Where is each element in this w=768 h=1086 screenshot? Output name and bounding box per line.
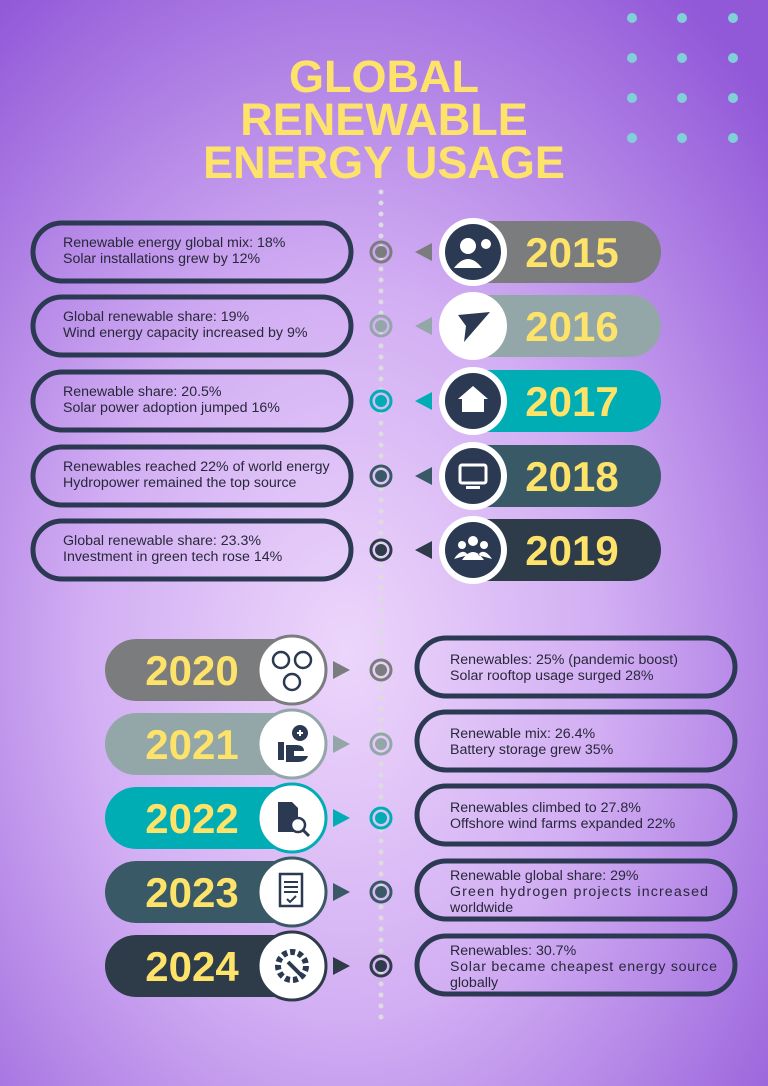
row 2015: Solar installations grew by 12% [63, 251, 261, 267]
row 2016: Global renewable share: 19% [63, 309, 250, 325]
row 2015: 2015 [525, 229, 619, 276]
title: ENERGY USAGE [203, 137, 565, 188]
row 2019: 2019 [525, 527, 619, 574]
row 2021: Battery storage grew 35% [450, 742, 614, 758]
row 2020: Solar rooftop usage surged 28% [450, 668, 654, 684]
row 2016: Wind energy capacity increased by 9% [63, 325, 308, 341]
row 2018: Renewables reached 22% of world energy [63, 459, 330, 475]
row 2023: worldwide [449, 900, 513, 916]
row 2017: Solar power adoption jumped 16% [63, 400, 280, 416]
row 2017 [33, 367, 661, 435]
row 2019 [33, 516, 661, 584]
timeline dotted line [378, 192, 384, 1020]
row 2016: 2016 [525, 303, 619, 350]
row 2019: Global renewable share: 23.3% [63, 533, 261, 549]
row 2020: Renewables: 25% (pandemic boost) [450, 652, 678, 668]
row 2024: globally [450, 975, 499, 991]
title [203, 51, 565, 188]
row 2023: Green hydrogen projects increased [450, 884, 708, 900]
row 2021: 2021 [145, 721, 239, 768]
row 2023 [105, 858, 735, 926]
row 2024 [105, 932, 735, 1000]
row 2019: Investment in green tech rose 14% [63, 549, 283, 565]
row 2015 [33, 218, 661, 286]
row 2018: Hydropower remained the top source [63, 475, 297, 491]
row 2024: 2024 [145, 943, 239, 990]
row 2017: 2017 [525, 378, 619, 425]
row 2022: Renewables climbed to 27.8% [450, 800, 641, 816]
row 2016 [33, 292, 661, 360]
title: RENEWABLE [240, 94, 528, 145]
row 2021: Renewable mix: 26.4% [450, 726, 595, 742]
row 2022: Offshore wind farms expanded 22% [450, 816, 676, 832]
row 2022: 2022 [145, 795, 239, 842]
row 2017: Renewable share: 20.5% [63, 384, 222, 400]
decorative dots [627, 13, 738, 143]
title: GLOBAL [289, 51, 479, 102]
row 2021 [105, 710, 735, 778]
row 2023: Renewable global share: 29% [450, 868, 639, 884]
row 2020 [105, 636, 735, 704]
row 2024: Solar became cheapest energy source [450, 959, 717, 975]
row 2023: 2023 [145, 869, 239, 916]
row 2015: Renewable energy global mix: 18% [63, 235, 286, 251]
row 2018 [33, 442, 661, 510]
row 2018: 2018 [525, 453, 619, 500]
row 2022 [105, 784, 735, 852]
row 2024: Renewables: 30.7% [450, 943, 577, 959]
row 2020: 2020 [145, 647, 239, 694]
